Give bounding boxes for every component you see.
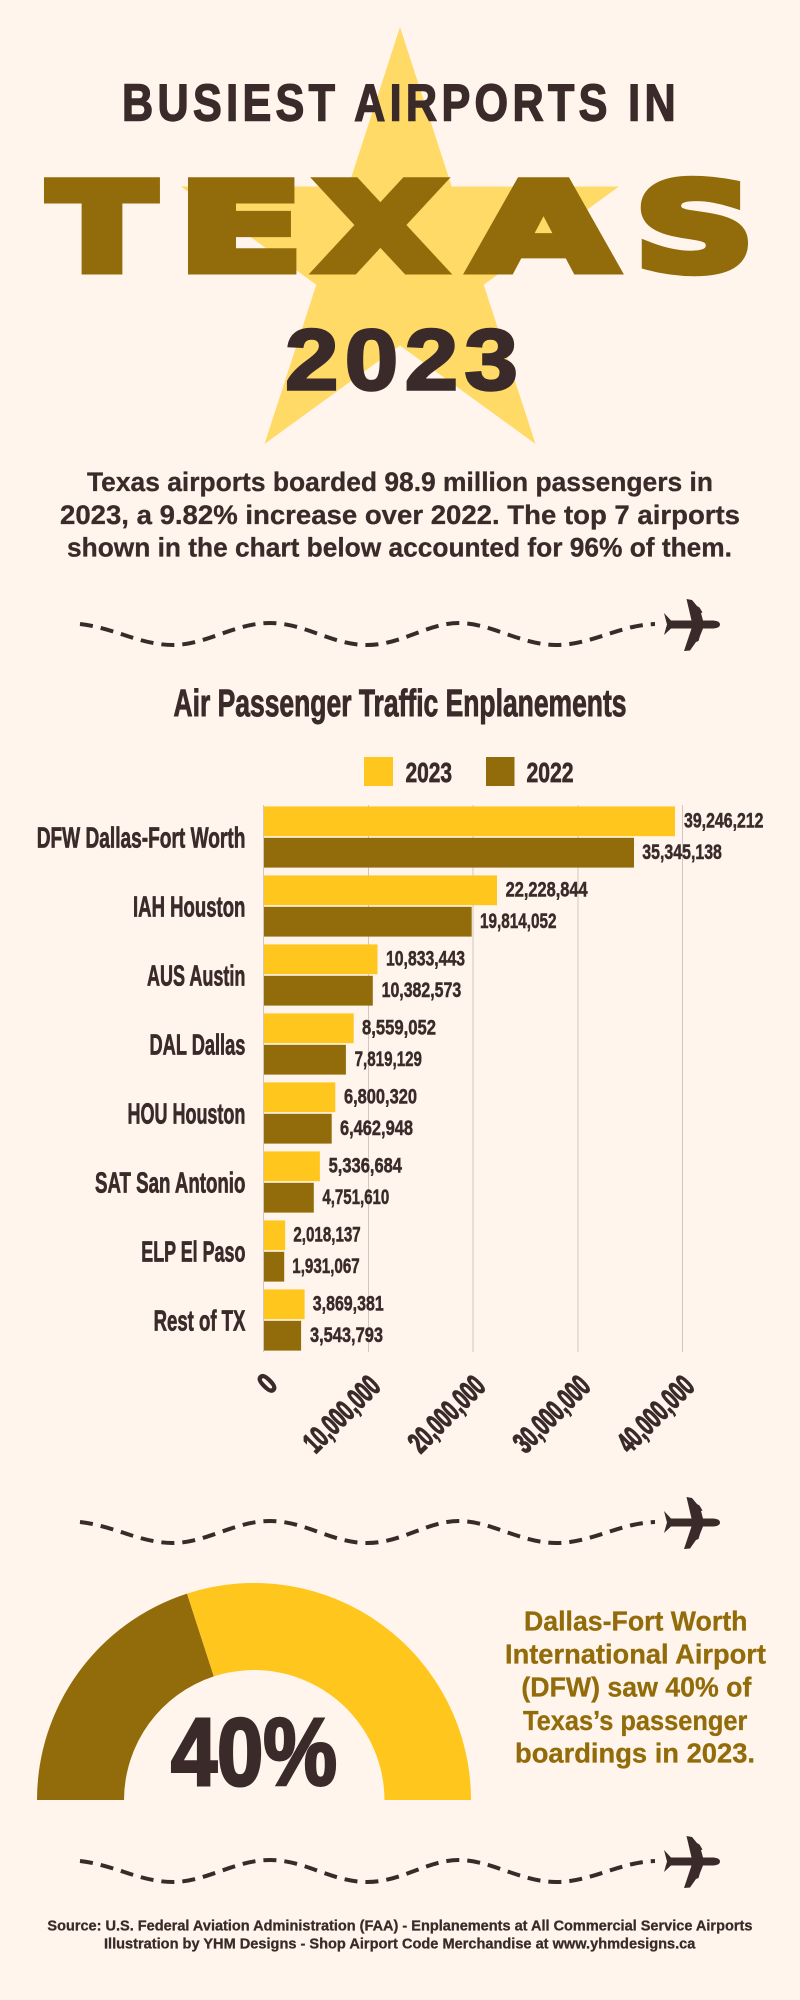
callout: DFW share: boardings in 2023. [515,1738,755,1769]
source footer [47,1919,752,1953]
row: Rest of TX: 3,869,381 [313,1292,384,1316]
x axis labels: 20,000,000 [402,1370,492,1459]
row: DAL: 7,819,129 [355,1048,422,1071]
flight path divider 1 [80,599,720,651]
row: ELP: 2,018,137 [293,1224,361,1246]
title: Texas: E [178,158,303,299]
x axis labels [251,1368,701,1459]
row: DFW: 35,345,138 [642,841,722,864]
title: Texas: S [635,158,754,299]
source footer: Illustration by YHM Designs - Shop Airport Code Merchandise at www.yhmdesigns.ca [104,1937,696,1953]
callout: DFW share: Dallas-Fort Worth [524,1606,747,1637]
row: IAH: 19,814,052 [480,910,556,933]
row: HOU: 6,800,320 [344,1086,417,1108]
row: IAH: 22,228,844 [506,878,588,902]
row: IAH: IAH Houston [133,892,245,924]
row: Rest of TX [154,1289,384,1351]
row: HOU: HOU Houston [128,1098,245,1130]
row: SAT: 4,751,610 [322,1186,389,1209]
title: Texas: X [317,158,444,299]
title: busiest airports in: BUSIEST AIRPORTS IN [122,75,676,132]
flight path divider 3 [80,1836,720,1888]
row: HOU: 6,462,948 [340,1117,413,1140]
row: DAL [150,1013,436,1075]
gauge value: 40% [171,1699,337,1806]
callout: DFW share: International Airport [505,1638,766,1669]
intro paragraph [60,467,740,562]
row: ELP [141,1220,361,1282]
callout: DFW share: Texas’s passenger [523,1705,748,1736]
row: HOU [128,1082,417,1144]
title: 2023: 2023 [285,312,518,408]
icon: star [181,27,619,444]
title: Texas: A [472,158,616,299]
title: Texas: T [49,158,155,299]
row: DAL: DAL Dallas [150,1030,245,1062]
row: IAH [133,875,588,937]
intro paragraph: 2023, a 9.82% increase over 2022. The top 7 airports [60,500,740,530]
row: DFW: 39,246,212 [684,810,764,832]
legend: 2022 [526,757,574,788]
source footer: Source: U.S. Federal Aviation Administration (FAA) - Enplanements at All Commercial Service Airports [47,1919,752,1935]
x axis labels: 10,000,000 [297,1370,387,1459]
icon: airplane [664,599,720,651]
row: AUS [147,944,465,1006]
row: DAL: 8,559,052 [362,1016,436,1040]
x axis labels: 40,000,000 [611,1370,701,1459]
row: ELP: ELP El Paso [141,1236,245,1268]
x axis labels: 30,000,000 [507,1370,597,1459]
icon: airplane [664,1497,720,1549]
icon: airplane [664,1836,720,1888]
row: ELP: 1,931,067 [292,1255,360,1278]
callout: DFW share: (DFW) saw 40% of [521,1672,752,1703]
row: AUS: 10,382,573 [382,979,461,1002]
row: SAT: 5,336,684 [329,1154,402,1178]
row: DFW: DFW Dallas-Fort Worth [37,822,245,854]
legend [364,757,574,788]
gauge: 40 percent [37,1583,471,1806]
legend: 2023 [406,757,452,788]
row: SAT: SAT San Antonio [95,1168,245,1200]
flight path divider 2 [80,1497,720,1549]
x axis labels: 0 [251,1368,284,1400]
row: Rest of TX: Rest of TX [154,1306,245,1338]
row: AUS: 10,833,443 [386,948,465,970]
intro paragraph: Texas airports boarded 98.9 million passengers in [87,467,713,497]
row: DFW [37,806,763,868]
row: Rest of TX: 3,543,793 [310,1324,383,1347]
row: AUS: AUS Austin [147,960,245,992]
callout: DFW share [505,1606,766,1769]
bar chart [37,805,763,1459]
intro paragraph: shown in the chart below accounted for 96% of them. [67,532,732,562]
row: SAT [95,1151,402,1213]
